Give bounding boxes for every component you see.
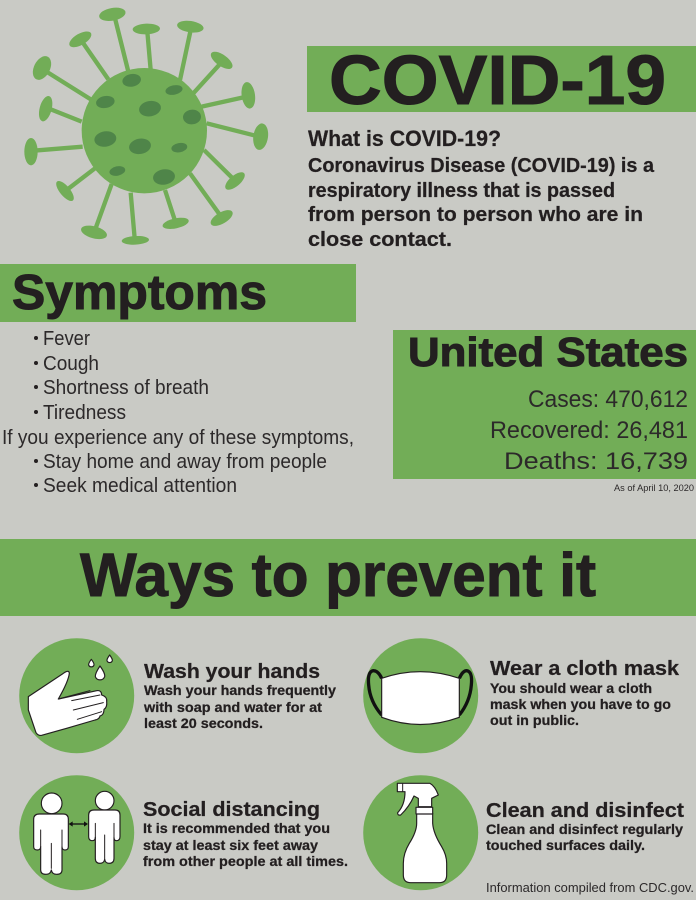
prevention heading: Ways to prevent it [80,541,596,609]
icon: cloth mask [363,638,478,753]
symptoms list [2,328,354,497]
text: wash your hands: Wash your hands [144,660,320,683]
icon: spray bottle [363,775,478,890]
symptoms heading: Symptoms [12,266,267,320]
text: social distancing: from other people at all times. [143,854,348,869]
text: social distancing [143,798,348,869]
icon: two people distancing [19,775,134,890]
text: wear a cloth mask: out in public. [490,713,579,728]
text: wash your hands: least 20 seconds. [144,716,263,731]
panel: United States statistics: Cases: 470,612 [528,386,688,413]
source note: Information compiled from CDC.gov. [486,880,694,895]
text: social distancing: stay at least six feet away [143,838,319,853]
text block: what is COVID-19: respiratory illness that is passed [308,180,615,202]
text: wear a cloth mask: You should wear a cloth [490,681,652,696]
text: clean and disinfect: Clean and disinfect [486,799,684,822]
text: wash your hands: Wash your hands frequently [144,683,337,698]
text block: what is COVID-19: Coronavirus Disease (COVID-19) is a [308,155,655,177]
icon: washing hands [19,638,134,753]
panel: United States statistics: Recovered: 26,481 [490,417,688,444]
date note: As of April 10, 2020 [614,483,694,494]
text: wash your hands [143,660,337,731]
symptoms heading [0,264,356,322]
symptoms list: Shortness of breath [43,377,209,399]
symptoms list: Stay home and away from people [43,451,327,473]
symptoms list: Seek medical attention [43,475,237,497]
text: social distancing: Social distancing [143,798,320,821]
panel: United States statistics [393,329,696,479]
symptoms list: Cough [43,353,99,375]
text block: what is COVID-19: close contact. [308,229,452,251]
text: clean and disinfect [486,799,684,853]
symptoms list: If you experience any of these symptoms, [2,427,354,449]
text: social distancing: It is recommended that you [143,821,330,836]
symptoms list: Fever [43,328,90,350]
text: wear a cloth mask [490,657,680,728]
text block: what is COVID-19: What is COVID-19? [308,126,501,151]
panel: United States statistics: Deaths: 16,739 [504,448,688,475]
symptoms list: Tiredness [43,402,126,424]
title banner: COVID-19 [329,41,666,119]
text: clean and disinfect: Clean and disinfect regularly [486,822,684,837]
text: clean and disinfect: touched surfaces daily. [486,838,645,853]
text: wash your hands: with soap and water for at [143,700,323,715]
text: wear a cloth mask: Wear a cloth mask [490,657,680,680]
prevention heading [0,539,696,616]
text block: what is COVID-19 [308,126,655,251]
text: wear a cloth mask: mask when you have to go [490,697,671,712]
panel: United States statistics: United States [408,329,688,375]
text block: what is COVID-19: from person to person who are in [308,204,643,226]
icon: coronavirus [24,6,270,245]
